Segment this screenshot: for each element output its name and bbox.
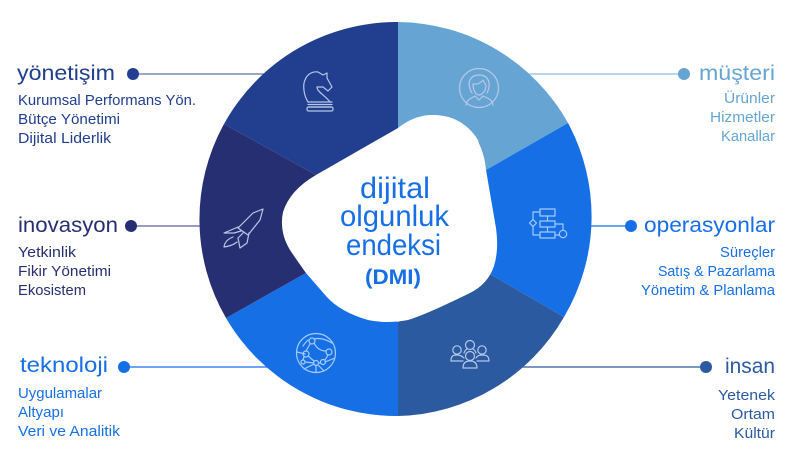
label: operasyonlar	[625, 214, 776, 299]
label: teknoloji	[18, 354, 130, 440]
center white shape	[282, 115, 497, 322]
label: inovasyon: Fikir Yönetimi	[18, 263, 111, 280]
icon: chess knight	[304, 72, 333, 111]
center title	[340, 172, 449, 289]
donut chart	[199, 22, 592, 416]
icon: network globe	[296, 334, 336, 372]
center title: olgunluk	[340, 200, 449, 233]
label: yönetişim: yönetişim	[17, 62, 115, 85]
label: inovasyon: Ekosistem	[18, 282, 86, 299]
label: inovasyon: inovasyon	[18, 214, 118, 237]
connector lines	[124, 74, 706, 367]
label: insan: Kültür	[734, 425, 775, 442]
label: müşteri: Hizmetler	[710, 109, 775, 126]
label: yönetişim	[17, 62, 196, 147]
label: müşteri: Ürünler	[724, 89, 775, 107]
center title: endeksi	[346, 229, 441, 262]
label: müşteri: müşteri	[699, 62, 775, 85]
slice: teknoloji	[226, 273, 398, 416]
label: yönetişim: Dijital Liderlik	[18, 130, 112, 147]
label: yönetişim: Bütçe Yönetimi	[18, 111, 120, 128]
label: insan: insan	[725, 355, 775, 378]
label: operasyonlar: Satış & Pazarlama	[658, 263, 776, 280]
slice: müşteri	[398, 22, 568, 170]
label: teknoloji: teknoloji	[20, 354, 108, 377]
label: operasyonlar: operasyonlar	[644, 214, 775, 237]
label: operasyonlar: Yönetim & Planlama	[641, 282, 776, 299]
icon: rocket	[224, 209, 263, 248]
center title: (DMI)	[365, 266, 421, 289]
center title: dijital	[360, 172, 430, 205]
icon: customer	[460, 68, 498, 108]
slice: insan	[398, 274, 564, 416]
slice: operasyonlar	[486, 123, 592, 317]
label: insan: Ortam	[731, 406, 775, 423]
label: insan	[700, 355, 776, 442]
slice: inovasyon	[199, 124, 316, 318]
label: insan: Yetenek	[718, 387, 776, 404]
label: teknoloji: Uygulamalar	[18, 385, 102, 402]
label: teknoloji: Veri ve Analitik	[18, 423, 121, 440]
label: inovasyon	[18, 214, 137, 299]
label: yönetişim: Kurumsal Performans Yön.	[18, 92, 196, 109]
label: teknoloji: Altyapı	[18, 404, 64, 421]
label: inovasyon: Yetkinlik	[18, 244, 77, 261]
icon: team	[451, 340, 489, 368]
label: müşteri	[678, 62, 775, 145]
slice: yönetişim	[224, 22, 398, 175]
icon: process flow	[530, 209, 567, 238]
label: müşteri: Kanallar	[721, 128, 775, 145]
label: operasyonlar: Süreçler	[720, 244, 775, 261]
